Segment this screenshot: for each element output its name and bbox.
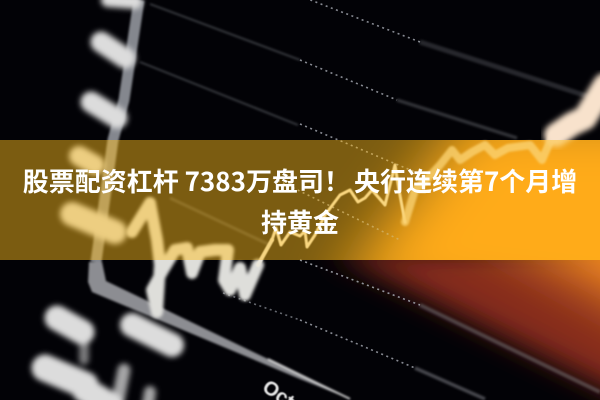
title <box>23 162 577 240</box>
orange glow under banner <box>314 140 600 260</box>
axis labels, blurred <box>45 0 172 400</box>
title: 持黄金 <box>261 203 339 240</box>
title: 股票配资杠杆 7383万盘司！央行连续第7个月增 <box>23 162 577 199</box>
chart axis <box>88 0 350 399</box>
gridlines <box>140 0 600 399</box>
price line <box>132 5 600 312</box>
banner <box>0 140 600 260</box>
orange glow below banner <box>330 260 600 400</box>
